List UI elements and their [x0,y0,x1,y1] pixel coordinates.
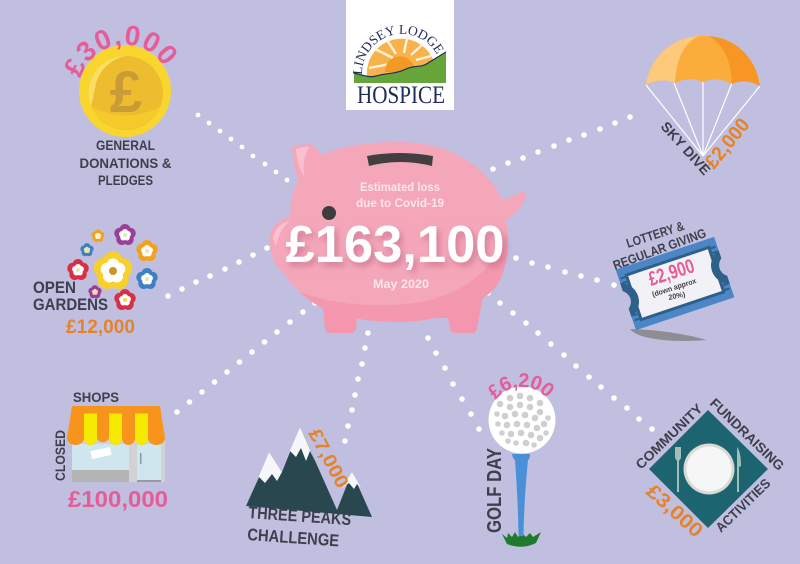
logo: Lindsey Lodge Hospice [346,0,454,110]
label: THREE PEAKS [248,503,352,529]
amount: £6,200 [488,373,554,400]
dotted connectors [165,113,655,444]
snout highlight [273,221,290,246]
panel: lottery and regular giving [612,222,734,341]
pig caption line two: due to Covid-19 [356,196,444,210]
pig eye [322,206,336,220]
icon: flowers [67,224,158,310]
icon: gold coin [79,45,171,137]
label: OPEN [33,279,76,297]
label line two: DONATIONS & [80,156,172,171]
icon: grass [502,532,541,547]
label line two: GARDENS [33,296,108,314]
amount: £12,000 [66,317,135,338]
label: closed: CLOSED [52,430,68,481]
pig belly shade [300,232,508,322]
label: ACTIVITIES [713,476,773,535]
icon: table mat [649,410,768,528]
amount: £3,000 [642,480,707,542]
note line two: 20%) [668,290,687,302]
logo wordmark: HOSPICE [357,82,445,109]
label: LOTTERY & [624,218,686,251]
amount: £2,000 [701,114,754,173]
label: FUNDRAISING [707,395,787,474]
icon: golf ball [488,386,556,454]
panel: sky dive [646,36,760,178]
total amount: £163,100 [286,216,504,274]
date: May 2020 [373,277,429,291]
icon: shop [67,406,165,482]
icon: plate [684,444,734,494]
panel: golf day [484,373,556,547]
pig legs [322,296,483,333]
icon: sun [367,38,434,76]
label line two: REGULAR GIVING [611,225,708,273]
note: (down approx [651,276,698,299]
label: SHOPS [73,389,119,405]
label: COMMUNITY [633,401,706,472]
amount: £100,000 [68,486,168,512]
label: GOLF DAY [484,447,506,533]
icon: mountains [246,427,372,517]
label line three: PLEDGES [98,173,153,188]
label: GENERAL [96,138,155,153]
icon: knife [737,447,741,492]
icon: ticket [616,236,734,330]
amount: £7,000 [304,425,352,492]
logo arc text: LINDSEY LODGE [353,25,444,74]
icon: parachute canopy [646,36,760,86]
icon: fork [675,447,681,492]
panel: three peaks [246,425,372,550]
icon: parachute lines [646,81,760,156]
panel: open gardens [33,224,158,338]
ticket shadow [630,329,707,341]
icon: tee [512,454,530,536]
icon: gold coin: £ [110,60,142,125]
amount: £2,900 [646,255,697,291]
pig caption: Estimated loss [360,180,440,194]
panel: community fundraising [633,395,787,542]
amount: £30,000 [65,26,176,78]
panel: general donations [65,26,176,188]
coin slot [367,153,433,166]
pig body [270,142,526,322]
piggy bank [270,142,526,333]
label: SKY DIVE [658,118,714,178]
label line two: CHALLENGE [247,525,340,550]
panel: shops [52,389,168,512]
green hill [354,52,446,83]
ear highlight [296,147,310,176]
